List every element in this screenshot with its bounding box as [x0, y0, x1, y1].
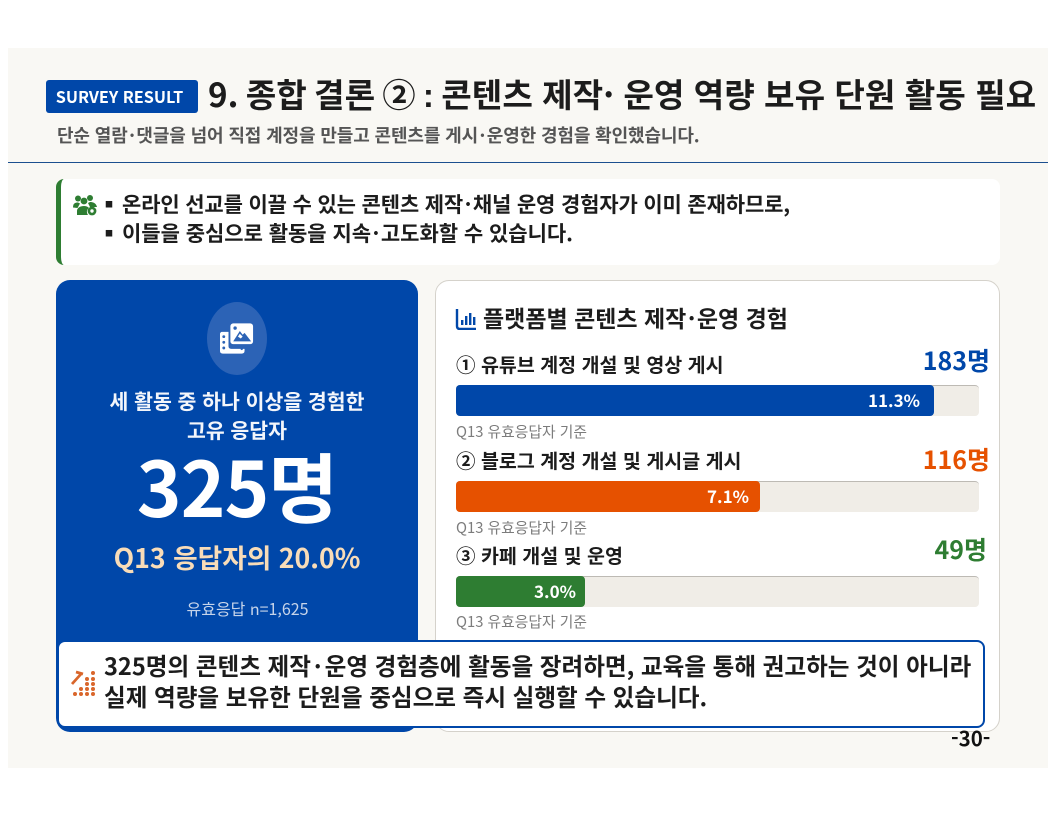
row 3 bar — [456, 576, 979, 607]
row 1 note: Q13 유효응답자 기준 — [456, 421, 587, 442]
row 2 fill: 7.1% — [707, 483, 749, 508]
row 3 note: Q13 유효응답자 기준 — [456, 611, 587, 632]
stat description: 고유 응답자 — [187, 414, 287, 444]
icon: media in ellipse — [207, 302, 267, 375]
row 2 label: ② 블로그 계정 개설 및 게시글 게시 — [456, 445, 741, 474]
icon: orange dots and arrow — [71, 670, 95, 696]
bullet text line 1: 온라인 선교를 이끌 수 있는 콘텐츠 제작·채널 운영 경험자가 이미 존재하므로, — [122, 189, 790, 219]
panel: key message — [56, 179, 1000, 265]
row 1 fill: 11.3% — [868, 387, 920, 412]
bullet text line 2: ▪ — [97, 214, 121, 249]
callout: conclusion — [57, 640, 985, 728]
bullet text line 2: 이들을 중심으로 활동을 지속·고도화할 수 있습니다. — [122, 218, 573, 248]
chart heading: 플랫폼별 콘텐츠 제작·운영 경험 — [483, 300, 788, 334]
row 3 label: ③ 카페 개설 및 운영 — [456, 540, 623, 569]
subtitle: 단순 열람·댓글을 넘어 직접 계정을 만들고 콘텐츠를 게시·운영한 경험을 확인했습니다. — [57, 122, 700, 148]
row 2 bar — [456, 481, 979, 512]
row 1 fill — [456, 385, 934, 416]
row 1 count: 183명 — [923, 342, 990, 378]
row 3 fill — [456, 576, 585, 607]
header divider line — [8, 162, 1048, 163]
panel: main stat — [56, 280, 418, 732]
callout text: 실제 역량을 보유한 단원을 중심으로 즉시 실행할 수 있습니다. — [104, 679, 707, 713]
row 3 fill: 3.0% — [534, 578, 576, 603]
big number: 325명 — [137, 429, 337, 539]
row 2 fill — [456, 481, 760, 512]
callout text: 325명의 콘텐츠 제작·운영 경험층에 활동을 장려하면, 교육을 통해 권고하는 것이 아니라 — [104, 648, 971, 682]
row 3 count: 49명 — [934, 531, 987, 567]
row 2 count: 116명 — [923, 441, 990, 477]
bullet text line 1: ▪ — [97, 185, 121, 220]
row 2 note: Q13 유효응답자 기준 — [456, 517, 587, 538]
title: 9. 종합 결론 ② : 콘텐츠 제작· 운영 역량 보유 단원 활동 필요 — [208, 68, 1036, 117]
badge: survey result — [46, 80, 198, 113]
sample size: 유효응답 n=1,625 — [186, 596, 308, 620]
row 1 label: ① 유튜브 계정 개설 및 영상 게시 — [456, 349, 724, 378]
callout text — [104, 648, 971, 713]
page number: -30- — [951, 722, 990, 752]
icon: people with gear — [73, 195, 97, 216]
panel: platform experience — [435, 280, 1000, 732]
stat description — [109, 385, 365, 444]
share of respondents: Q13 응답자의 20.0% — [114, 537, 360, 576]
icon: bar chart — [456, 309, 476, 330]
row 1 bar — [456, 385, 979, 416]
stat description: 세 활동 중 하나 이상을 경험한 — [109, 385, 365, 415]
badge: survey result: SURVEY RESULT — [56, 84, 183, 108]
